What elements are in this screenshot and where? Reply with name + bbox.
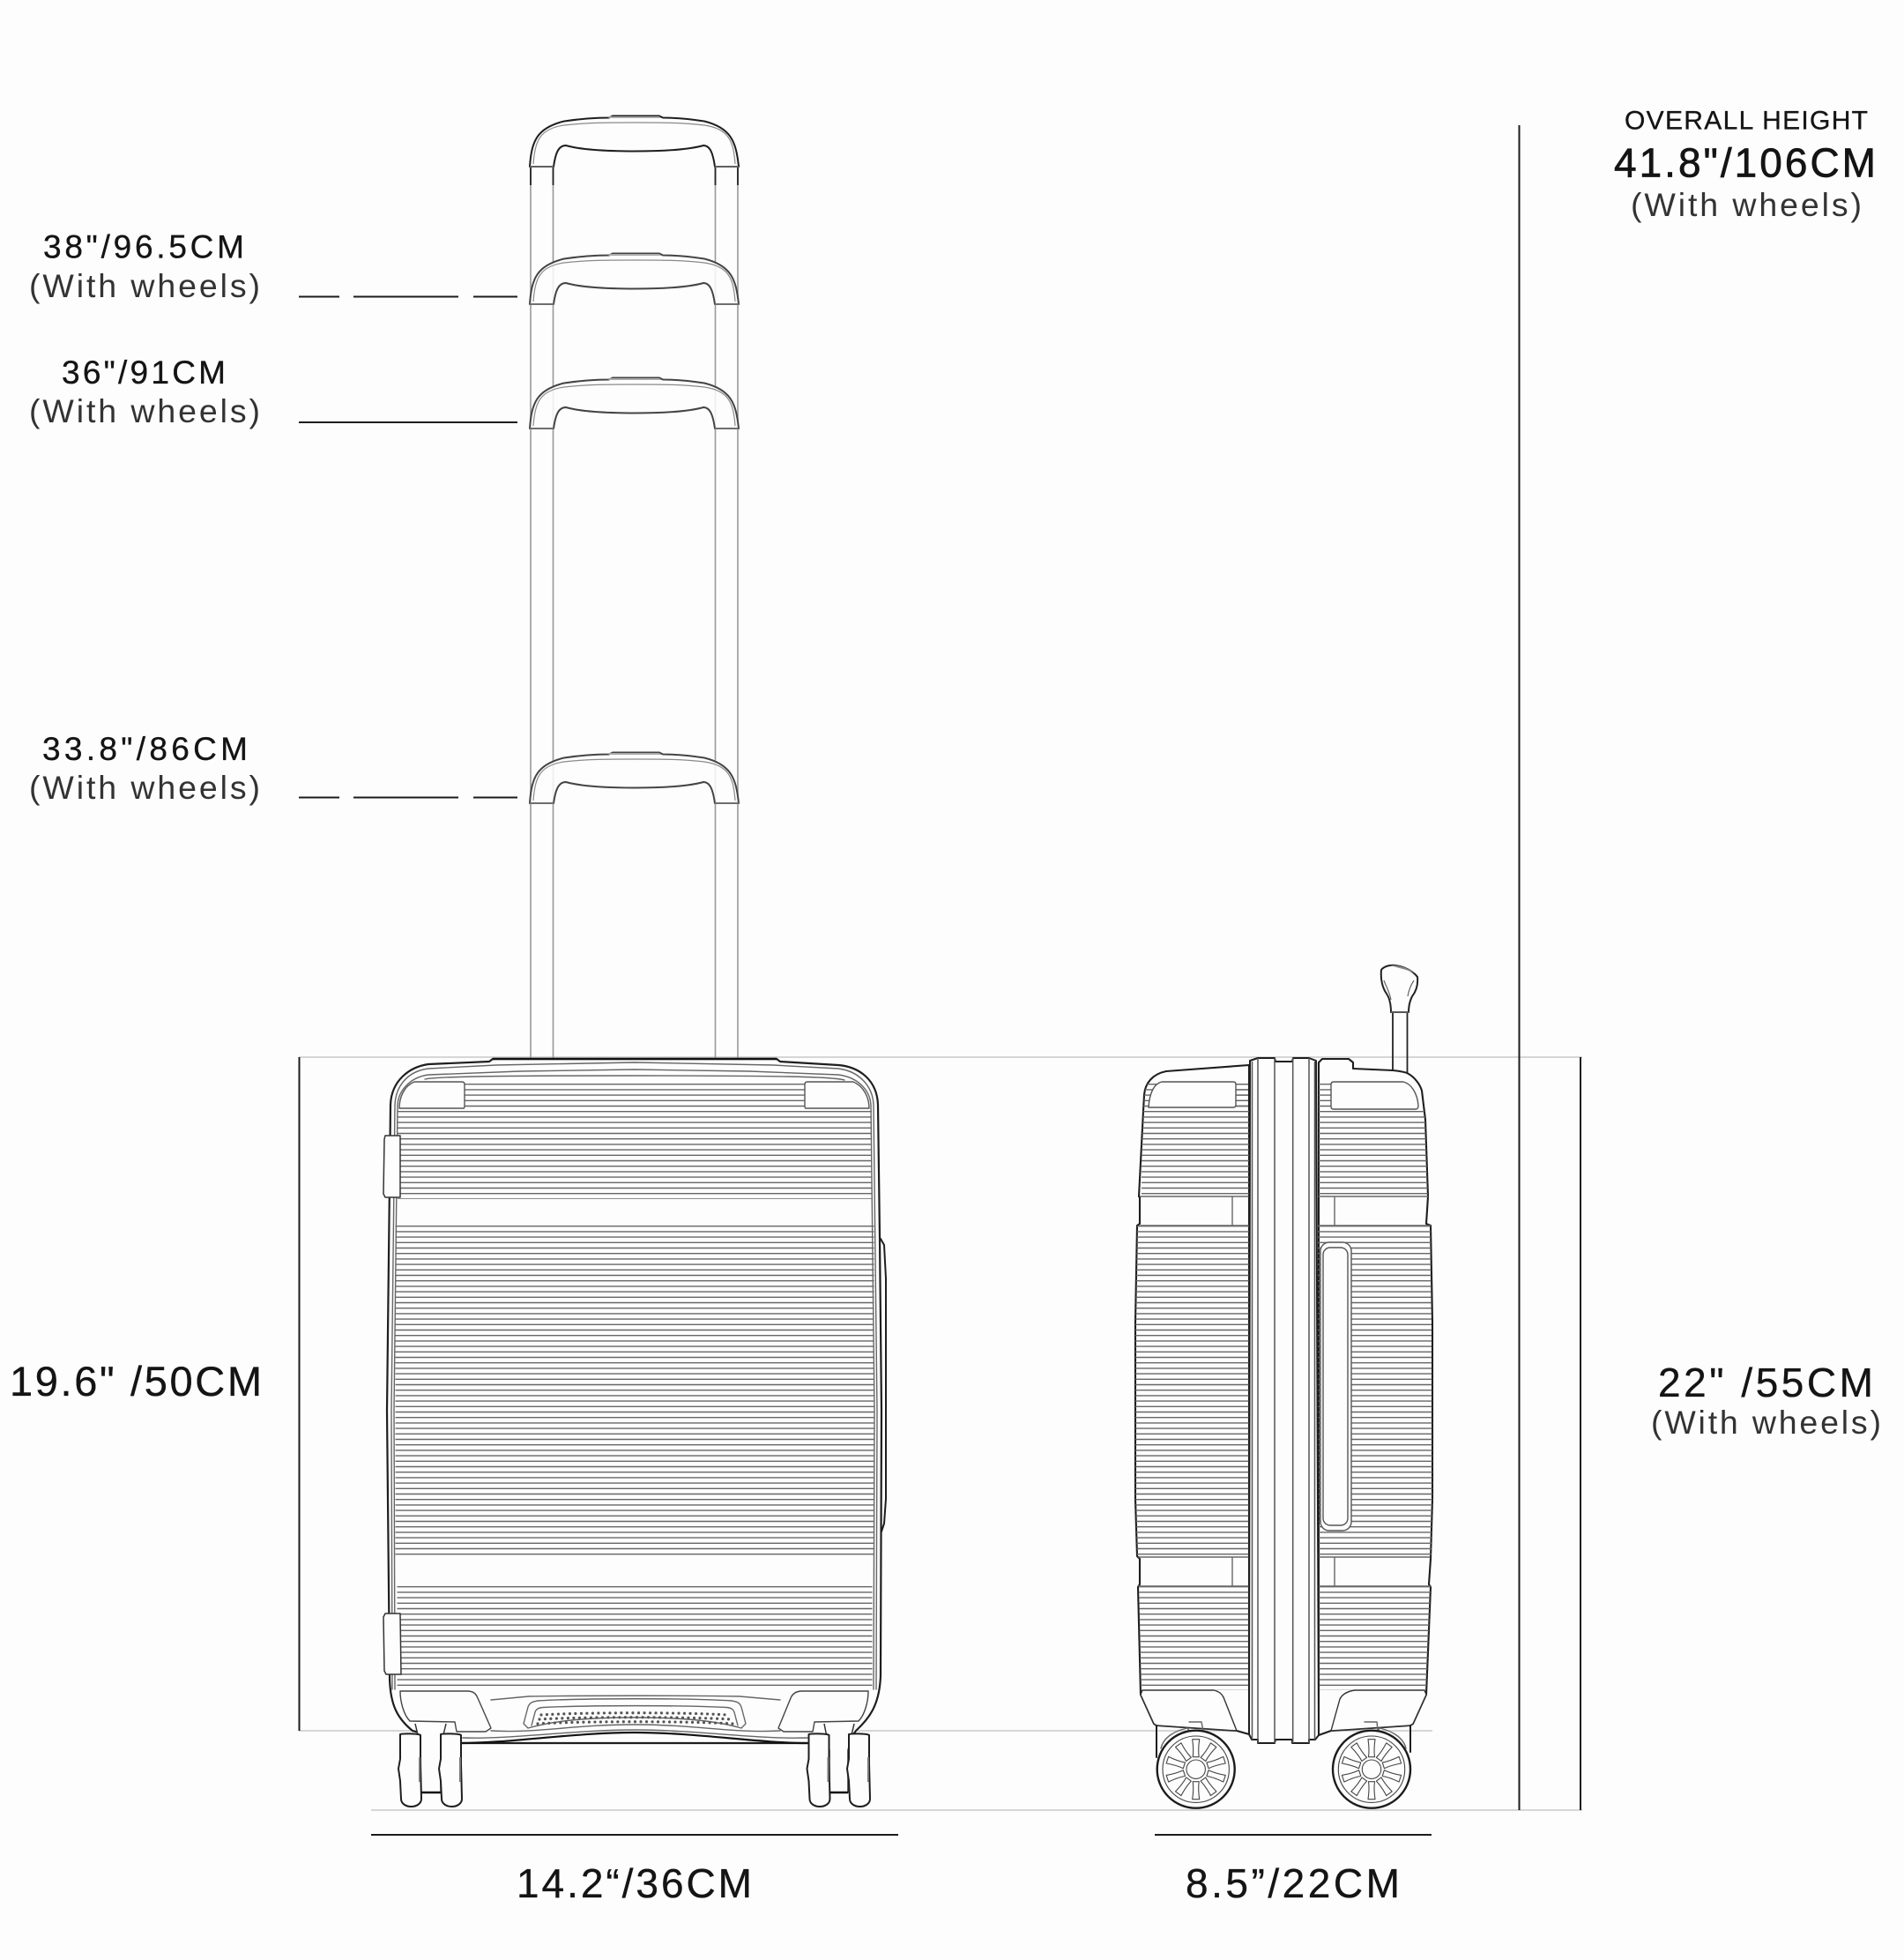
side top block left [1149,1082,1236,1107]
label: 38 in handle: 38"/96.5CM [43,229,244,265]
ribs: main panel [395,1226,874,1559]
label: 38 in handle: (With wheels) [29,267,260,304]
top corner block right [805,1082,869,1108]
width dimension line: front [371,1834,898,1836]
side body right half [1319,1059,1432,1735]
side handle grip [1381,965,1417,1012]
side ribs [1192,1084,1375,1690]
top rim line [493,1058,777,1060]
front view: suitcase body [383,1059,886,1743]
label: 36 in handle: 36"/91CM [62,354,226,391]
label: overall side height: (With wheels) [1651,1404,1881,1441]
side wheel fenders [1161,1722,1406,1748]
callout line: 36 in [299,421,517,423]
top corner block left [399,1082,465,1108]
bottom edge [460,1733,807,1743]
side telescopic tube [1393,1012,1407,1076]
body inner outlines [391,1062,877,1689]
body outer outline [387,1059,881,1743]
lower corner block right [778,1691,868,1732]
handle tubes [531,167,738,1058]
lower corner block left [400,1691,491,1732]
label: overall height: 41.8"/106CM [1614,139,1876,185]
shell arc below rim [425,1076,844,1080]
side body left half [1135,1065,1249,1734]
side lower corner left [1141,1690,1237,1731]
dimension guide lines [299,125,1582,1810]
right side bulge [881,1239,886,1531]
carry grip [524,1699,746,1728]
handle: 33.8 in position [530,753,739,803]
side latch upper [383,1136,400,1197]
secondary shell line [394,1069,874,1689]
side lower corner right [1331,1690,1426,1731]
side carry handle [1320,1242,1351,1531]
label: 33.8 in handle [29,731,260,806]
label: 36 in handle: (With wheels) [29,392,260,429]
side centre zipper strips [1249,1058,1319,1743]
label: overall side height [1651,1360,1881,1441]
label: overall side height: 22" /55CM [1658,1360,1873,1405]
label: overall height: (With wheels) [1631,186,1862,223]
handle: 36 in position [530,377,739,429]
ribs: upper centre [464,1084,806,1108]
width dimension line: side [1155,1834,1432,1836]
ribs: upper panel [398,1111,872,1199]
label: body height: 19.6" /50CM [10,1358,262,1405]
label: width: 14.2“/36CM [517,1860,752,1906]
grip dots [541,1713,727,1715]
label: overall height [1614,106,1876,223]
callout line: 33.8 in [299,797,517,799]
side wheel right [1333,1731,1410,1808]
label: 38 in handle [29,229,260,304]
front view: telescopic handle at four heights [530,116,739,1058]
side view: suitcase [1135,965,1432,1808]
handle: extended 41.8 in [530,116,739,167]
callout line: 38 in [299,296,517,298]
side latch lower [383,1613,401,1674]
front view: wheels left pair [398,1724,462,1807]
handle: 38 in position [530,254,739,304]
side top block right [1331,1082,1418,1109]
ribs: lower panel [397,1586,873,1686]
label: overall height: OVERALL HEIGHT [1625,106,1868,136]
front view: wheels right pair [807,1724,870,1807]
bottom recess [463,1695,807,1738]
side band dividers [1139,1196,1430,1586]
label: 36 in handle [29,354,260,429]
label: depth: 8.5”/22CM [1186,1860,1400,1906]
side wheel left [1157,1731,1235,1808]
side wheel brackets [1157,1725,1410,1757]
label: 33.8 in handle: (With wheels) [29,769,260,806]
label: 33.8 in handle: 33.8"/86CM [42,731,248,767]
